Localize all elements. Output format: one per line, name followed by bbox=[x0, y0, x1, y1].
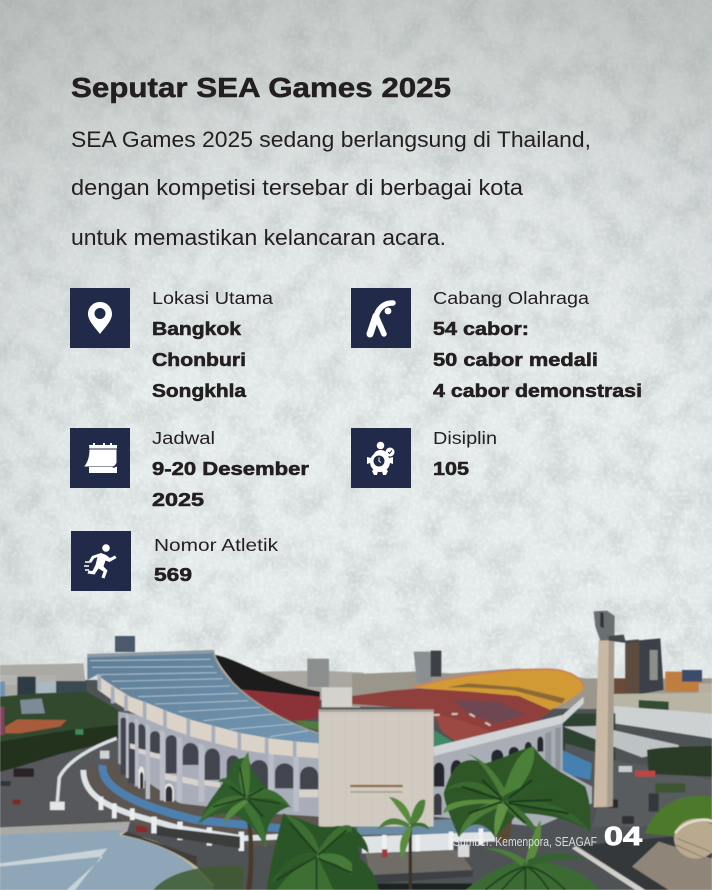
panel: cabang olahraga: 54 cabor: bbox=[433, 318, 529, 339]
icon: person, gear and clock bbox=[351, 428, 411, 488]
panel: disiplin: Disiplin bbox=[433, 428, 497, 448]
icon: calendar bbox=[70, 428, 130, 488]
palm five bbox=[465, 820, 599, 890]
right half of photo bbox=[319, 611, 712, 890]
panel: nomor atletik: 569 bbox=[154, 564, 192, 585]
palm one bbox=[197, 752, 292, 890]
panel: cabang olahraga bbox=[351, 288, 642, 401]
red seats and field bbox=[352, 688, 552, 746]
panel: disiplin: 105 bbox=[433, 458, 469, 479]
facade right side bbox=[434, 697, 592, 833]
title: Seputar SEA Games 2025 bbox=[71, 72, 451, 103]
intro paragraph bbox=[71, 127, 591, 250]
panel: lokasi utama bbox=[70, 288, 273, 401]
palm three bbox=[444, 747, 591, 843]
icon: location pin bbox=[70, 288, 130, 348]
panel: lokasi utama: Songkhla bbox=[152, 380, 247, 401]
road barrier bbox=[57, 738, 117, 802]
panel: jadwal: 9-20 Desember bbox=[152, 458, 309, 479]
panel: lokasi utama: Chonburi bbox=[152, 349, 246, 370]
tall building, left sky bbox=[307, 659, 329, 687]
city and trees, left bbox=[0, 636, 363, 772]
panel: nomor atletik: Nomor Atletik bbox=[154, 535, 278, 555]
stand interior, far side bbox=[215, 655, 360, 731]
shrubs bbox=[153, 866, 243, 890]
source credit: Sumber: Kemenpora, SEAGAF bbox=[453, 835, 597, 849]
panel: cabang olahraga: 4 cabor demonstrasi bbox=[433, 380, 642, 401]
stadium facade and arches bbox=[118, 712, 320, 817]
yellow roof seats bbox=[412, 669, 584, 711]
panel: lokasi utama: Lokasi Utama bbox=[152, 288, 273, 308]
palm two bbox=[267, 813, 360, 890]
palm trees bbox=[197, 752, 360, 890]
panel: cabang olahraga: Cabang Olahraga bbox=[433, 288, 589, 308]
lower walkway and fence bbox=[357, 827, 495, 890]
ground base bbox=[0, 680, 712, 890]
left half of photo bbox=[0, 636, 363, 890]
stepped stadium roof bbox=[87, 650, 318, 743]
road and trees right bbox=[592, 746, 712, 827]
cream roof fascia bbox=[97, 675, 318, 758]
page number: 04 bbox=[604, 821, 643, 851]
fascia ribs bbox=[99, 674, 295, 757]
intro paragraph: dengan kompetisi tersebar di berbagai kota bbox=[71, 175, 524, 200]
palm six bbox=[352, 827, 379, 890]
foreground rooftop bbox=[572, 796, 712, 890]
intro paragraph: SEA Games 2025 sedang berlangsung di Thailand, bbox=[71, 127, 591, 152]
stadium concourse and blue walkway bbox=[87, 760, 320, 847]
dark tower right bbox=[625, 638, 664, 697]
panel: disiplin bbox=[351, 428, 497, 488]
light tower bbox=[594, 611, 639, 807]
beige building bbox=[319, 709, 434, 827]
photo: national stadium and surroundings bbox=[0, 611, 712, 890]
icon: stretching figure bbox=[351, 288, 411, 348]
vehicles bbox=[1, 751, 147, 832]
panel: lokasi utama: Bangkok bbox=[152, 318, 242, 339]
perimeter fence bbox=[83, 770, 280, 851]
intro paragraph: untuk memastikan kelancaran acara. bbox=[71, 225, 446, 250]
lower roof foreground bbox=[0, 822, 213, 890]
palm four bbox=[377, 797, 429, 890]
distant skyline bbox=[352, 651, 712, 710]
panel: cabang olahraga: 50 cabor medali bbox=[433, 349, 598, 370]
hall roofs right bbox=[562, 693, 712, 793]
road, left bbox=[0, 740, 118, 827]
panel: jadwal: Jadwal bbox=[152, 428, 215, 448]
panel: jadwal: 2025 bbox=[152, 489, 204, 510]
icon: running athlete bbox=[71, 531, 131, 591]
panel: jadwal bbox=[70, 428, 309, 510]
panel: nomor atletik bbox=[71, 531, 278, 591]
